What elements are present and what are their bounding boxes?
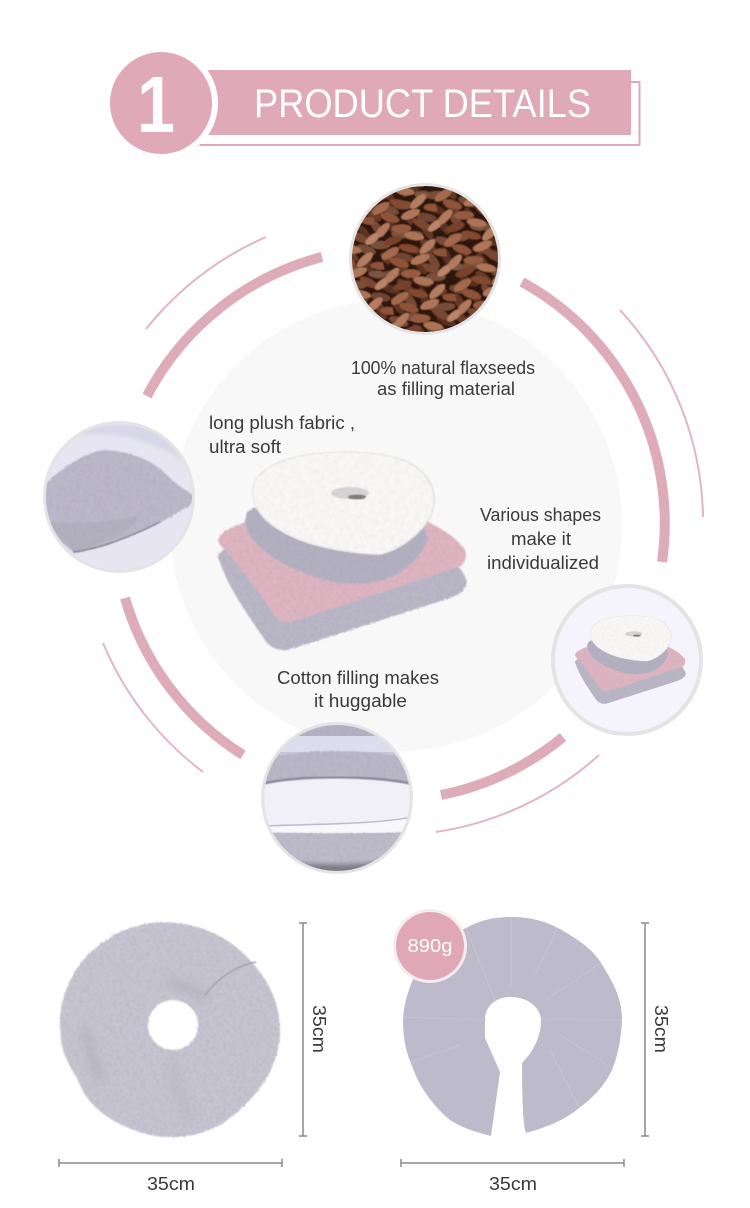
sheet fold seams	[403, 917, 622, 1108]
dimension: sheet width	[401, 1159, 624, 1194]
dimension: sheet width: 35cm	[489, 1174, 537, 1194]
heading number badge	[104, 46, 218, 160]
weight badge: 890g	[408, 936, 452, 956]
label: plush fabric	[209, 413, 355, 457]
label: plush fabric: long plush fabric ,	[209, 413, 355, 433]
inner sheet insert photo	[403, 917, 622, 1136]
label: plush fabric: ultra soft	[209, 437, 281, 457]
label: various shapes	[480, 505, 601, 573]
heading number badge: 1	[137, 60, 175, 149]
label: cotton filling	[277, 668, 439, 711]
dimension: donut height	[299, 923, 329, 1136]
photo circle: product stack small	[551, 584, 703, 736]
dimension: sheet height	[641, 923, 671, 1136]
dimension: sheet height: 35cm	[651, 1005, 671, 1053]
heading banner	[204, 70, 631, 135]
photo circle: flaxseeds	[349, 183, 501, 335]
photo circle: cotton filling	[261, 722, 413, 874]
weight badge	[393, 909, 467, 983]
heading offset outline	[195, 82, 640, 145]
heading: product details	[104, 46, 640, 160]
plush donut cushion photo	[60, 922, 280, 1137]
label: various shapes: make it	[511, 529, 571, 549]
label: various shapes: Various shapes	[480, 505, 601, 525]
photo circle: plush fabric	[40, 421, 195, 573]
label: flaxseeds: 100% natural flaxseeds	[351, 358, 535, 378]
label: flaxseeds	[351, 358, 535, 399]
thin arcs ring	[103, 237, 703, 832]
dimension: donut width	[59, 1159, 282, 1194]
background panel circle	[170, 299, 622, 751]
label: flaxseeds: as filling material	[377, 379, 515, 399]
dimension: donut width: 35cm	[147, 1174, 195, 1194]
label: various shapes: individualized	[487, 553, 599, 573]
thick arcs ring	[125, 257, 665, 795]
heading text: PRODUCT DETAILS	[254, 82, 591, 126]
label: cotton filling: it huggable	[314, 691, 407, 711]
label: cotton filling: Cotton filling makes	[277, 668, 439, 688]
product stack photo	[218, 451, 467, 650]
dimension: donut height: 35cm	[309, 1005, 329, 1053]
